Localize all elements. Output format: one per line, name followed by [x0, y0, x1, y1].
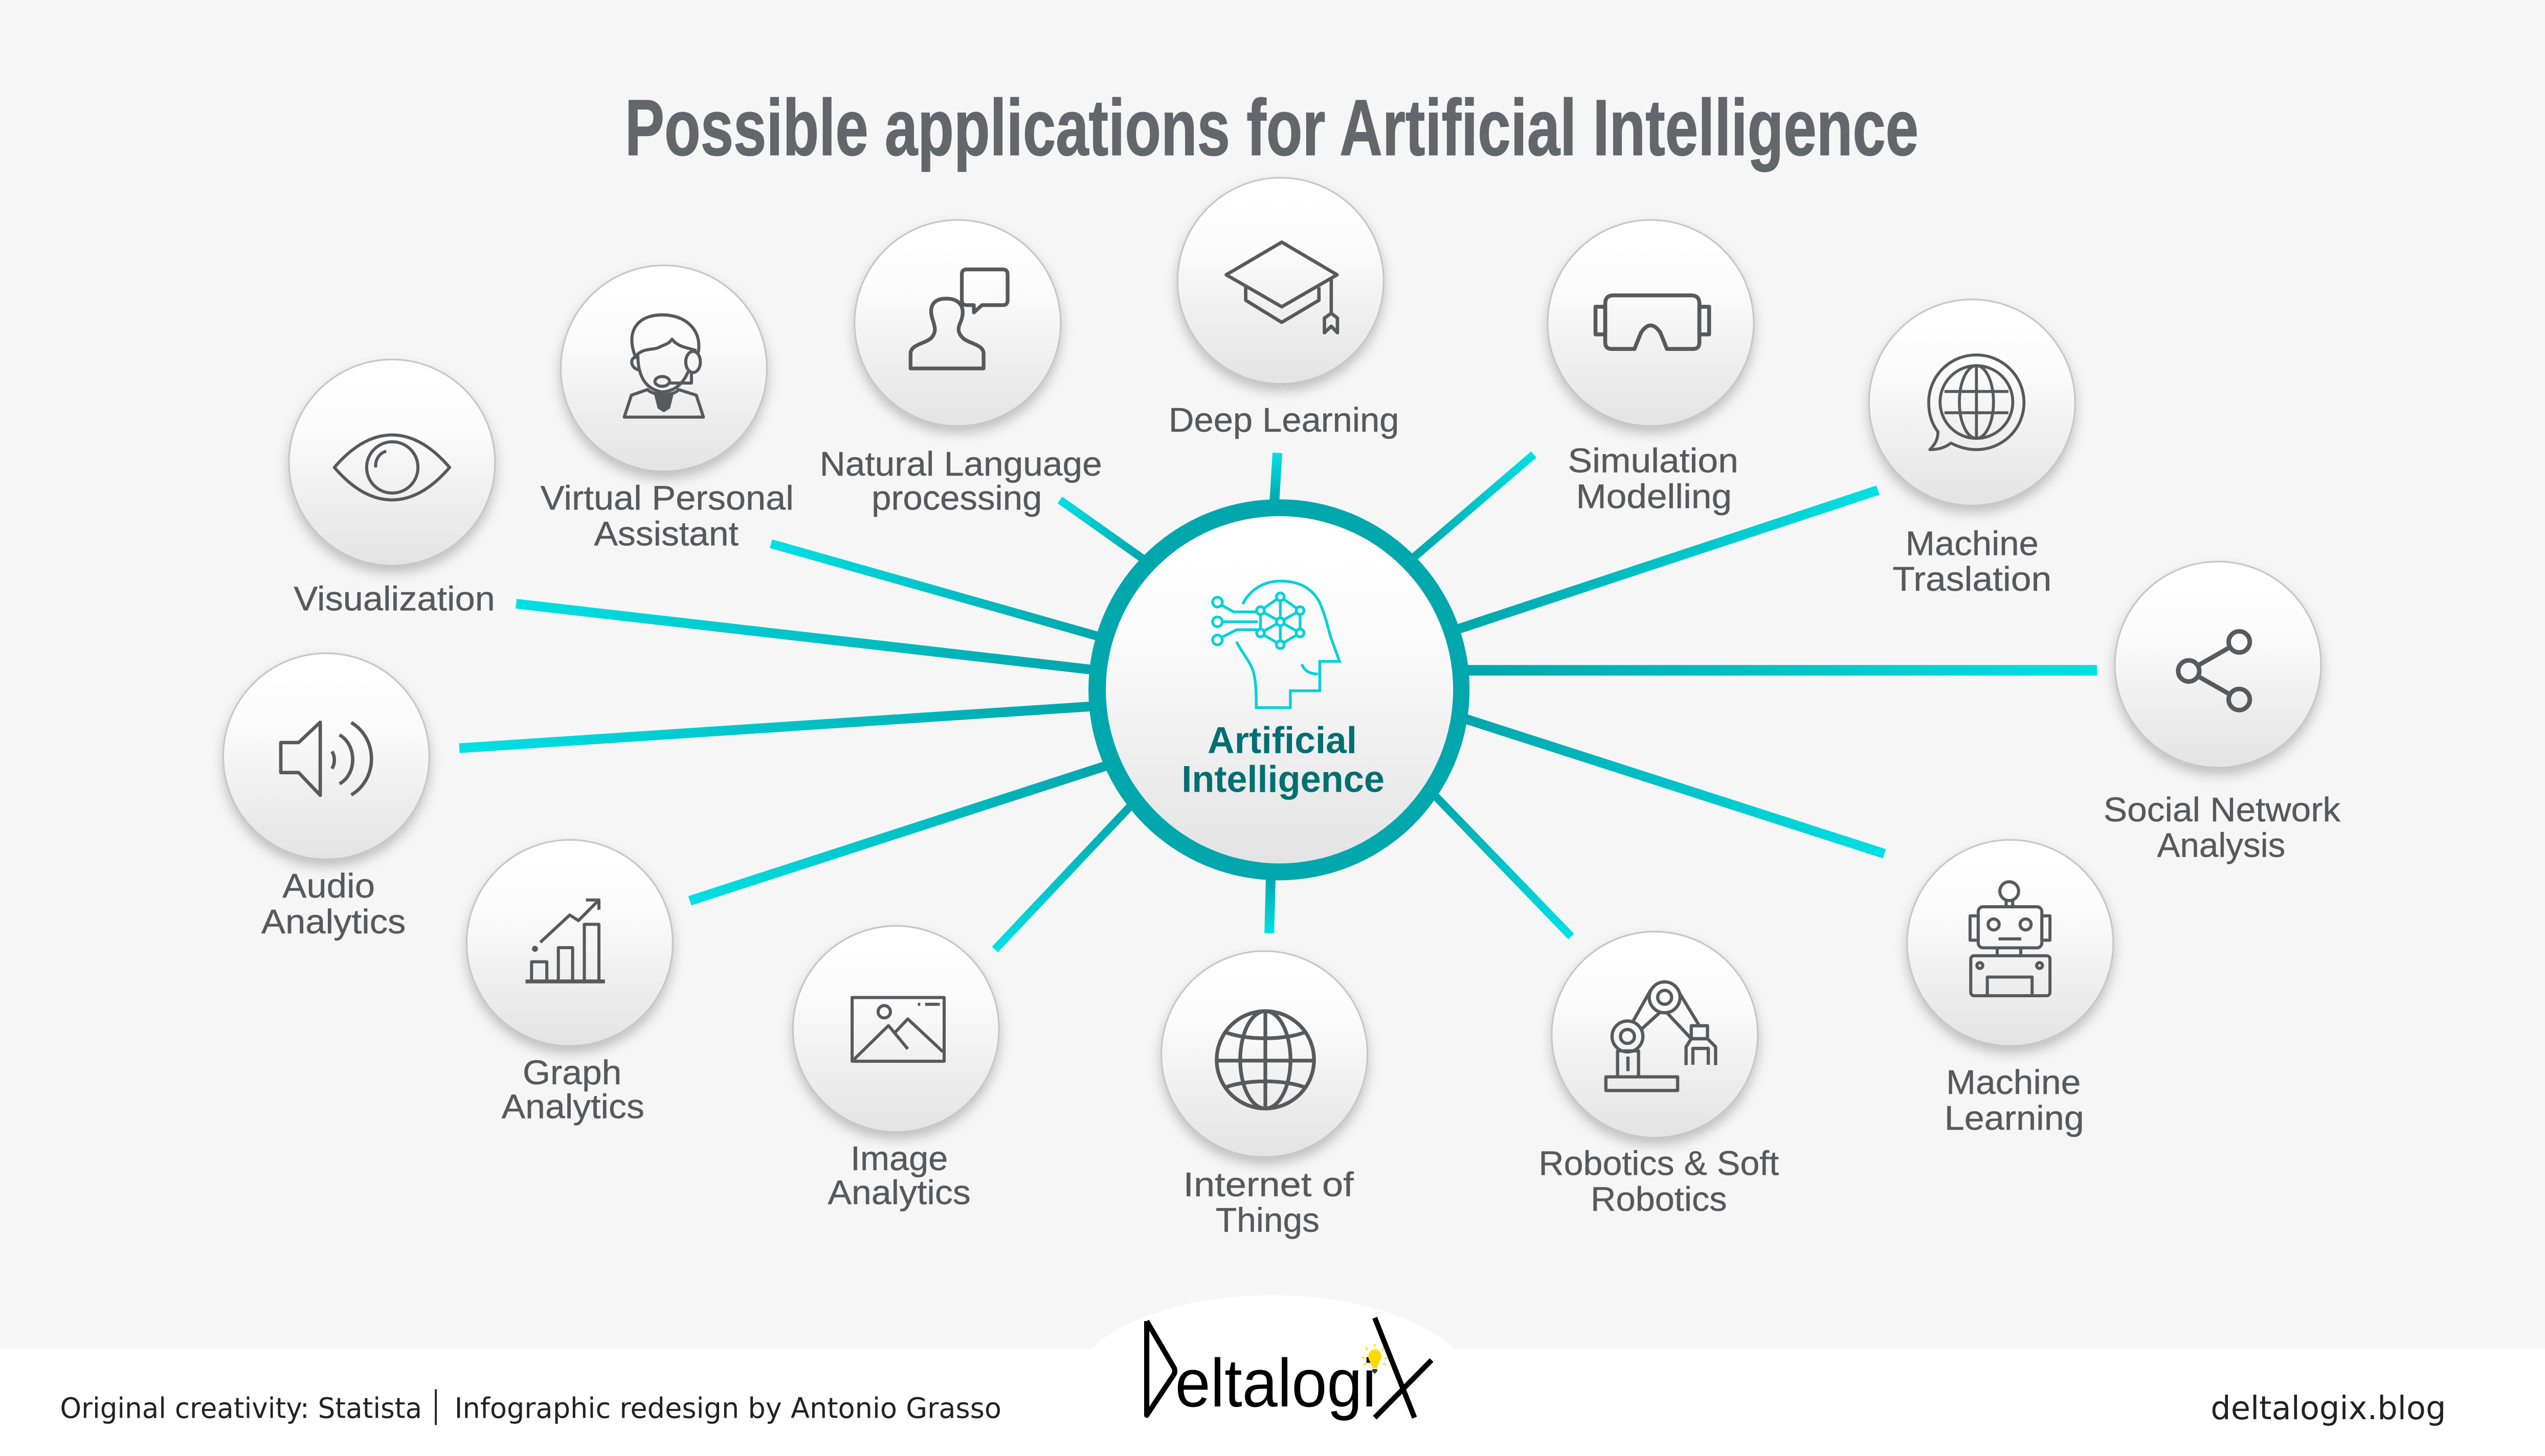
panel: Graph Analytics — [466, 840, 673, 1126]
logo backdrop — [1069, 1295, 1476, 1456]
label: Things — [1216, 1202, 1320, 1240]
label: Graph — [523, 1054, 621, 1092]
icon: light bulb — [1362, 1344, 1388, 1374]
label: Deep Learning — [1169, 401, 1399, 439]
icon: bar chart with rising arrow — [526, 900, 605, 981]
hub label: Intelligence — [1181, 759, 1385, 800]
label: Social Network — [2104, 791, 2341, 829]
label: Audio — [282, 867, 375, 905]
label: Analytics — [828, 1174, 971, 1212]
icon: share nodes — [2178, 632, 2250, 710]
panel: Machine Traslation — [1869, 300, 2075, 598]
label: Modelling — [1576, 478, 1732, 516]
panel: Machine Learning — [1907, 840, 2113, 1137]
icon: person with speech bubble — [910, 270, 1008, 368]
footer band — [0, 1349, 2545, 1456]
label: Robotics — [1591, 1180, 1727, 1218]
icon: VR goggles — [1596, 296, 1709, 349]
panel: Social Network Analysis — [2104, 562, 2341, 865]
panel: central hub Artificial Intelligence — [1088, 499, 1469, 880]
logo: Deltalogix: eltalogi — [1175, 1345, 1376, 1421]
label: Analytics — [502, 1088, 644, 1126]
connector spokes — [459, 453, 2097, 950]
label: Learning — [1945, 1100, 2084, 1137]
label: Natural Language — [820, 445, 1102, 483]
icon: robot arm — [1606, 982, 1715, 1090]
label: Simulation — [1568, 442, 1738, 480]
icon: eye — [334, 435, 450, 500]
panel: Audio Analytics — [223, 653, 429, 941]
panel: Image Analytics — [793, 926, 999, 1212]
label: Analytics — [261, 903, 406, 941]
logo: Deltalogix — [1147, 1318, 1432, 1421]
label: Internet of — [1183, 1166, 1354, 1204]
panel: Simulation Modelling — [1548, 220, 1754, 516]
icon: picture frame — [852, 997, 944, 1061]
label: Machine — [1946, 1064, 2081, 1102]
icon: globe speech bubble — [1929, 355, 2024, 450]
icon: globe — [1217, 1011, 1314, 1109]
label: Visualization — [294, 580, 495, 618]
panel: Visualization — [289, 360, 495, 618]
icon: speaker — [281, 722, 371, 795]
title: Possible applications for Artificial Intelligence — [625, 83, 1918, 172]
label: Assistant — [594, 515, 739, 553]
footer url: deltalogix.blog — [2211, 1389, 2446, 1427]
label: Machine — [1906, 525, 2039, 563]
label: Traslation — [1892, 561, 2051, 598]
footer credit: Original creativity: Statista — [60, 1392, 422, 1425]
label: Image — [851, 1140, 948, 1178]
panel: Virtual Personal Assistant — [541, 265, 794, 553]
footer credit: Infographic redesign by Antonio Grasso — [455, 1392, 1001, 1425]
icon: robot — [1970, 882, 2050, 996]
panel: Deep Learning — [1169, 178, 1399, 439]
footer credit — [60, 1390, 1001, 1425]
panel: Internet of Things — [1162, 951, 1368, 1240]
panel: Natural Language processing — [820, 220, 1102, 518]
label: Robotics & Soft — [1538, 1145, 1779, 1183]
label: processing — [872, 480, 1042, 518]
icon: graduation cap — [1226, 242, 1337, 333]
icon: headset agent — [624, 315, 703, 417]
label: Virtual Personal — [541, 480, 794, 518]
hub label: Artificial — [1208, 720, 1357, 761]
panel: Robotics and Soft Robotics — [1538, 932, 1779, 1218]
label: Analysis — [2157, 827, 2285, 865]
icon: AI head — [1213, 581, 1340, 708]
